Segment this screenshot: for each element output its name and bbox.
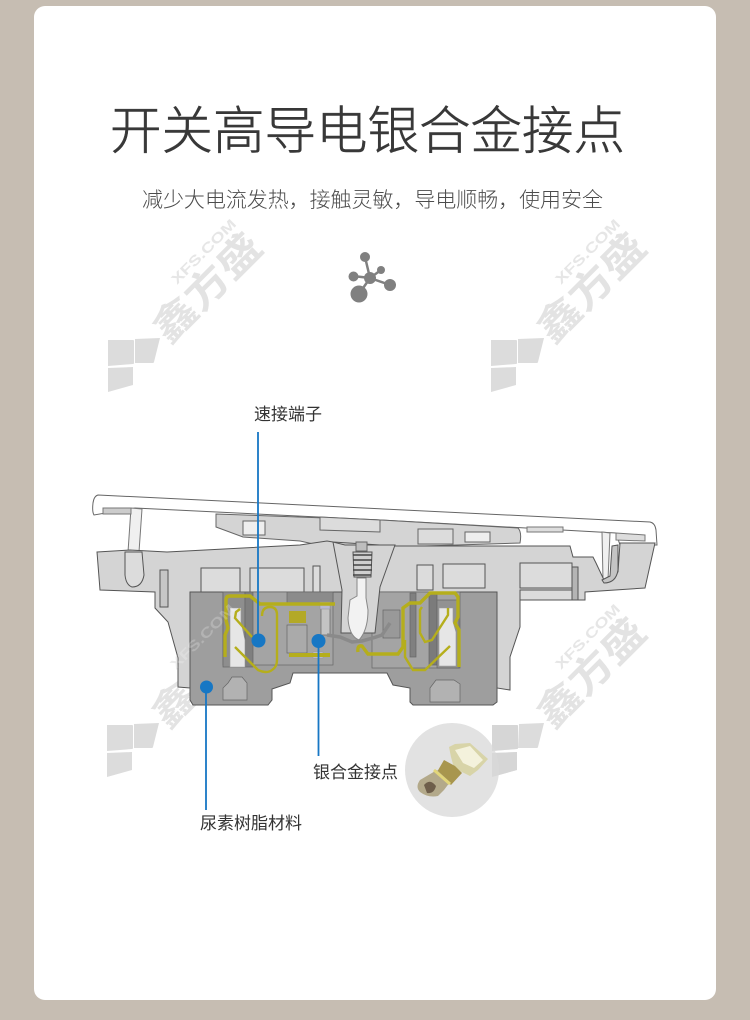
watermark: top left: XFS.COM bbox=[168, 216, 239, 287]
watermark: top right bbox=[491, 216, 655, 392]
diagram: switch cross-section bbox=[93, 495, 657, 705]
icon: silver alloy contact bbox=[418, 743, 488, 796]
inner chambers bbox=[223, 592, 460, 702]
watermark: top left bbox=[108, 216, 271, 392]
label: urea resin material: 尿素树脂材料 bbox=[200, 814, 302, 833]
watermark: bottom left: XFS.COM bbox=[167, 601, 238, 672]
watermark: top right: XFS.COM bbox=[552, 216, 623, 287]
leader: terminal bbox=[252, 432, 266, 648]
rocker plate bbox=[216, 514, 521, 547]
title: 开关高导电银合金接点 bbox=[110, 102, 625, 160]
leader: urea resin bbox=[200, 680, 213, 810]
watermark: bottom right: 鑫方盛 bbox=[529, 610, 655, 736]
urea resin base bbox=[190, 592, 497, 705]
watermark: bottom left bbox=[107, 601, 270, 777]
leader: silver contact bbox=[312, 634, 326, 756]
brass terminal right bbox=[358, 593, 459, 670]
cover legs bbox=[103, 508, 645, 580]
switch body bbox=[97, 541, 655, 690]
watermark: top right: 鑫方盛 bbox=[529, 225, 655, 351]
metal contact bridge bbox=[327, 623, 390, 642]
brass terminal left bbox=[225, 596, 335, 672]
logo mark over photo circle bbox=[492, 725, 518, 777]
centre post with screw bbox=[333, 542, 395, 640]
watermark overlay on base: XFS.COM bbox=[167, 601, 238, 672]
rocker windows bbox=[243, 517, 490, 544]
switch cover bbox=[93, 495, 657, 545]
white contact slots bbox=[230, 602, 456, 667]
contact photo circle bbox=[405, 723, 499, 817]
body recess outlines bbox=[125, 545, 618, 607]
icon: molecule bbox=[348, 252, 396, 302]
watermark: top left: 鑫方盛 bbox=[145, 225, 271, 351]
watermark: bottom right: XFS.COM bbox=[552, 601, 623, 672]
label: silver alloy contact: 银合金接点 bbox=[313, 763, 398, 782]
subtitle: 减少大电流发热，接触灵敏，导电顺畅，使用安全 bbox=[142, 189, 603, 212]
watermark: bottom right bbox=[492, 601, 655, 777]
watermark: bottom left: 鑫方盛 bbox=[144, 610, 270, 736]
label: quick-connect terminal: 速接端子 bbox=[254, 405, 322, 424]
